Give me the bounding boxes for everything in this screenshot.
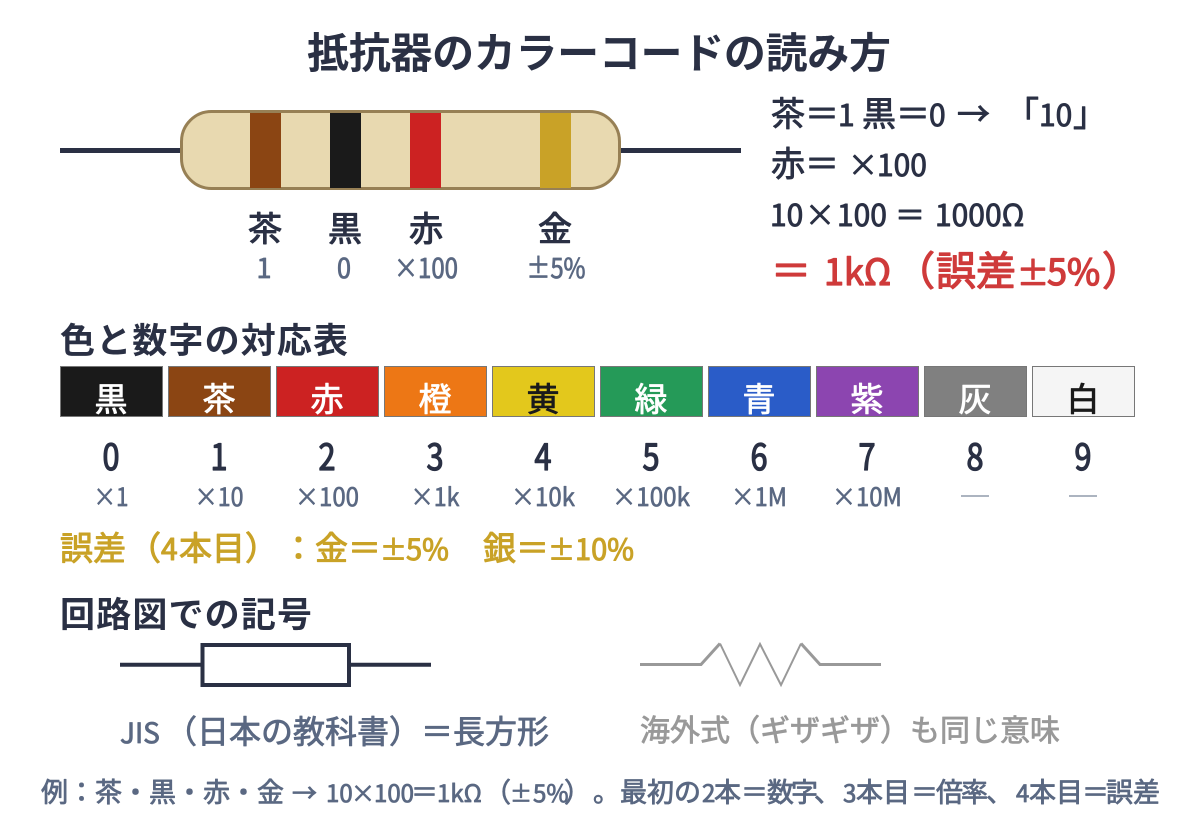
heading: circuit symbols: 回路図での記号 — [60, 587, 312, 638]
swatch names: 黄 — [526, 373, 560, 421]
band labels: ×100 — [394, 247, 458, 286]
band labels: ±5% — [526, 247, 586, 286]
digit row: 8 — [966, 429, 984, 481]
digit row: 1 — [210, 429, 228, 481]
tolerance note: 金＝ — [315, 522, 381, 570]
line 3: × — [805, 191, 835, 235]
swatch names — [94, 373, 1100, 421]
multiplier row: ×100 — [295, 478, 359, 514]
swatch names: 緑 — [634, 373, 668, 421]
tolerance note: 本目 — [179, 522, 245, 570]
band: red — [410, 113, 441, 188]
tolerance note: ± — [548, 529, 575, 568]
swatch names: 紫 — [850, 373, 884, 421]
footer example: 、 — [814, 771, 841, 810]
multiplier row: ×1k — [410, 478, 460, 514]
line 3: 100 — [837, 191, 887, 235]
band: brown — [250, 113, 281, 188]
tolerance note: 4 — [161, 525, 178, 569]
overseas caption: 海外式（ギザギザ）も同じ意味 — [640, 706, 1060, 750]
multiplier row: ×10M — [832, 478, 902, 514]
digit row: 0 — [102, 429, 120, 481]
footer example: 5% — [533, 774, 568, 809]
result line: 1kΩ — [824, 244, 891, 296]
footer example: 本目 — [856, 771, 910, 810]
footer example: 本＝ — [714, 771, 768, 810]
band labels: 黒 — [328, 202, 362, 251]
digit row: 4 — [534, 429, 552, 481]
band labels: 金 — [538, 202, 572, 251]
footer example: 4 — [1016, 774, 1029, 809]
tolerance note: 銀＝ — [483, 522, 549, 570]
footer example: 字 — [791, 771, 818, 810]
band labels: 1 — [256, 247, 272, 286]
footer example: 100 — [374, 774, 414, 809]
zigzag symbol — [640, 644, 881, 685]
footer example: 、 — [986, 771, 1013, 810]
line 2: 100 — [877, 141, 927, 185]
multiplier row: ×10k — [511, 478, 575, 514]
digit row: 3 — [426, 429, 444, 481]
multiplier row: ×1M — [731, 478, 787, 514]
line 1: 10 — [1039, 91, 1072, 135]
footer example: ± — [510, 777, 532, 809]
result line: ± — [1017, 249, 1049, 295]
footer example: 1kΩ — [437, 774, 482, 809]
tolerance note: ） — [245, 522, 278, 570]
footer example: 数 — [767, 771, 794, 810]
swatch names: 黒 — [94, 373, 128, 421]
tolerance note: ： — [282, 522, 315, 570]
footer example: 最初の — [620, 771, 701, 810]
swatch row — [60, 366, 1134, 416]
swatch names: 灰 — [958, 373, 992, 421]
band labels — [248, 202, 586, 286]
footer example: 本目 — [1029, 771, 1083, 810]
result line: ＝ — [771, 239, 811, 297]
band labels: 茶 — [248, 202, 282, 251]
band labels: 0 — [337, 247, 351, 286]
line 1: 0 — [929, 91, 946, 135]
JIS rectangle symbol — [120, 645, 431, 685]
line 2: 赤＝ — [771, 137, 839, 186]
calculation text — [770, 87, 1142, 297]
JIS caption: JIS — [120, 712, 160, 752]
footer example: → — [292, 774, 317, 810]
multiplier row: ×10 — [194, 478, 244, 514]
resistor illustration — [60, 112, 741, 188]
band labels: 赤 — [409, 202, 443, 251]
footer example: 誤差 — [1106, 771, 1160, 810]
line 1: 1 — [838, 91, 855, 135]
color table — [60, 366, 1134, 514]
footer example: 倍 — [936, 771, 963, 810]
swatch names: 白 — [1066, 373, 1100, 421]
footer example: ） — [564, 771, 591, 810]
swatch names: 橙 — [418, 373, 452, 421]
lead wires — [60, 148, 741, 153]
multiplier row: ×1 — [94, 478, 128, 514]
footer example: 2 — [702, 774, 715, 809]
title: 抵抗器のカラーコードの読み方 — [307, 20, 891, 81]
swatch names: 赤 — [310, 373, 344, 421]
line 1: 黒＝ — [862, 87, 930, 136]
line 3: 1000Ω — [935, 191, 1024, 235]
footer example: 3 — [843, 774, 856, 809]
digit row: 5 — [642, 429, 660, 481]
footer example: 。 — [593, 771, 620, 810]
band: black — [330, 113, 361, 188]
line 1: 」 — [1073, 87, 1107, 136]
tolerance note: 10% — [575, 527, 634, 569]
multiplier row — [94, 478, 1097, 514]
footer example: 10 — [326, 774, 353, 809]
tolerance note: ± — [380, 529, 407, 568]
footer example: 例：茶・黒・赤・金 — [41, 771, 284, 810]
footer example: 率 — [961, 771, 988, 810]
digit row: 6 — [750, 429, 768, 481]
result line: 5% — [1047, 244, 1100, 296]
result line: 誤差 — [936, 239, 1016, 297]
swatch names: 茶 — [202, 373, 236, 421]
footer example: × — [351, 774, 375, 809]
tolerance note: 5% — [406, 527, 449, 569]
result line: （ — [895, 239, 935, 297]
digit row: 7 — [858, 429, 876, 481]
tolerance note: （ — [128, 522, 161, 570]
line 1: 「 — [1005, 87, 1039, 136]
multiplier row: ×100k — [612, 478, 690, 514]
resistor body — [182, 112, 620, 188]
line 3: 10 — [770, 191, 803, 235]
band: gold — [540, 113, 571, 188]
line 3: ＝ — [895, 191, 925, 235]
footer example: ＝ — [411, 771, 438, 810]
swatch names: 青 — [742, 373, 776, 421]
heading: color table: 色と数字の対応表 — [60, 313, 348, 364]
line 1: → — [957, 88, 990, 136]
tolerance note: 誤差 — [60, 522, 126, 570]
footer example: ＝ — [1082, 771, 1109, 810]
line 1: 茶＝ — [771, 87, 839, 136]
footer example: （ — [484, 771, 511, 810]
digit row: 2 — [318, 429, 336, 481]
digit row — [102, 429, 1092, 481]
result line: ） — [1102, 239, 1142, 297]
line 2: × — [848, 141, 878, 185]
footer example: ＝ — [911, 771, 938, 810]
JIS caption: （日本の教科書）＝長方形 — [165, 707, 549, 753]
digit row: 9 — [1074, 429, 1092, 481]
